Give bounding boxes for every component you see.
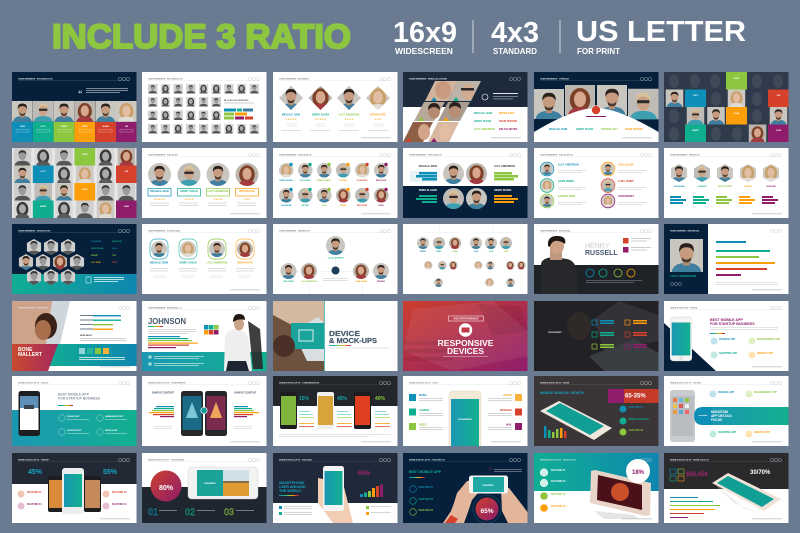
- slide: curved photo team: DAVID DUPONT: [625, 128, 644, 131]
- slide: large phone with side features: MAIL: [506, 424, 513, 426]
- slide: hexagon honeycomb: TEAM MEMBERS : HEXAGON 02: [18, 230, 51, 232]
- slide: Henry Russell profile: HENRY: [585, 243, 610, 250]
- slide: best mobile app black phone: BEST MOBILE APP: [58, 392, 90, 396]
- slide: hexagon honeycomb: HENRY SUSAN: [91, 247, 104, 250]
- slide: two black phones comparison: MOBILE MOCK-UP 01 : COMPARISON: [148, 382, 186, 384]
- slide: hexagon honeycomb: ROBERT: [91, 255, 99, 257]
- slide: landscape phone 80%: MOBILE MOCK-UP 01 : HORIZONTAL: [148, 458, 185, 462]
- slide: Bone Mallert: MALLERT: [18, 352, 42, 358]
- slide: phone group percentages: MOBILE MOCK-UP 01 : GROUP: [18, 460, 50, 462]
- slide: silver phone banner: FINANCE APP: [718, 391, 735, 394]
- slide: circular team 02: KATE ROSE: [357, 204, 368, 207]
- slide: circular team 01: ★★★: [244, 197, 251, 201]
- slide: circular team with rings: JOHN MONET: [618, 195, 634, 198]
- ratio: 4x3 standard: 4x3: [491, 17, 539, 49]
- slide: circular team 03 with bars: LUCY ANDERSON: [494, 165, 515, 168]
- slide: hexagon team with bars: JOHNSON: [698, 186, 707, 188]
- slide: Bone Mallert: MORE ABOUT: [80, 334, 93, 337]
- slide: dark mosaic team: [664, 72, 789, 142]
- slide: rectangle team: JOHN: [20, 126, 26, 128]
- ratio: 16x9 widescreen: 16x9: [393, 17, 457, 49]
- ratio: US Letter for print: FOR PRINT: [577, 46, 621, 56]
- slide: Johnson profile: JOHNSON: [148, 317, 186, 326]
- slide: mosaic colour grid: HENRY: [40, 206, 47, 208]
- slide: Henry Russell profile: [534, 224, 658, 294]
- slide: circular team 03 with bars: MICHALE JOHN: [419, 165, 437, 168]
- slide: circular team 01: [142, 148, 267, 218]
- slide: large phone with side features: MOBILE MOCK-UP 01 : GOLD: [409, 382, 439, 384]
- slide: circular team 02: THOMAS: [339, 179, 348, 182]
- slide: best mobile app white phone: MANAGEMENT APP: [757, 338, 780, 341]
- slide: circular team 01: MICHALE JOHN: [150, 190, 169, 193]
- slide: rectangle team: JIM: [125, 126, 128, 128]
- slide: circular team 02: SUSAN: [340, 204, 347, 207]
- slide: large phone with side features: MESSAGE: [500, 409, 512, 412]
- slide: org chart part 2: LUCA: [489, 250, 494, 253]
- slide: circular team 02: ROSA: [378, 204, 384, 207]
- slide: hexagon team with bars: ROSE ANN: [766, 185, 776, 188]
- slide: landscape phone 80%: 80%: [159, 485, 174, 492]
- slide: best mobile app black phone: MOBILE MOCK-UP 01 : BLACK: [18, 382, 49, 384]
- slide: hexagon team with bars: THOMAS: [744, 185, 753, 188]
- slide: curved photo team: [534, 72, 658, 142]
- slide: hands holding phone: BEST MOBILE APP: [409, 470, 442, 474]
- phone: mountain: [458, 417, 472, 421]
- slide: circular team 02: JOHN: [322, 205, 327, 207]
- phone: [540, 401, 612, 440]
- slide: best mobile app black phone: SERVICE APP: [105, 429, 118, 432]
- slide: large phone with side features: [403, 376, 528, 451]
- slide: hexagon honeycomb: LUCA: [112, 247, 117, 250]
- slide: Johnson profile: TEAM MEMBERS : INDIVIDUAL 02: [148, 306, 183, 310]
- slide: diamond team: ★★★★★: [315, 117, 327, 121]
- slide: rose-gold phone with bars: $65,458: [686, 472, 708, 478]
- slide: responsive devices divider: [403, 301, 528, 371]
- slide: smartphone in hand: USER AROUND: [279, 485, 306, 489]
- slide: parallelogram team: BRYAN KATE: [499, 112, 515, 115]
- slide: dark phone on teal: MOBILE MOCK-UP 01 : ROSE GOLD: [540, 460, 576, 462]
- slide: circular team 02: HENRY SUSAN: [280, 179, 293, 182]
- slide: mosaic colour grid: LUCY: [41, 171, 47, 173]
- slide: phone group percentages: FEATURE 03: [112, 491, 127, 494]
- slide: landscape phone 80%: [142, 453, 267, 523]
- slide: hexagon honeycomb: JANE ROSE: [112, 240, 123, 243]
- slide: dark phone on teal: 18%: [632, 470, 645, 476]
- ratio: 4x3 standard: STANDARD: [493, 46, 537, 56]
- slide: Bone Mallert: BONE: [18, 347, 33, 353]
- slide: curved photo team: HENRY SUSAN: [576, 128, 594, 131]
- slide: circular team 02: [273, 148, 398, 218]
- slide: parallelogram team: HENRY SUSAN: [474, 120, 492, 123]
- slide: smartphone in hand: MOBILE MOCK-UP 01 : HOLDING: [279, 460, 312, 462]
- slide: rectangle team: [12, 72, 137, 142]
- slide: silver phone banner: [664, 376, 789, 446]
- slide: device and mock-ups divider: DEVICE: [329, 331, 360, 338]
- slide: circular team 02: JOHN ADAM: [281, 204, 292, 207]
- slide: silver phone banner: mountain: [698, 414, 708, 417]
- slide: org chart part 2: HENRY: [436, 251, 442, 253]
- slide: org chart part 2: SUSAN: [452, 250, 458, 253]
- slide: dark phone on teal: FEATURE 01: [551, 469, 566, 472]
- slide: smartphone in hand: SMARTPHONE: [279, 481, 305, 485]
- slide: smartphone in hand: THE WORLD: [279, 489, 301, 493]
- slide: rose-gold phone with bars: MOBILE MOCK-UP 01 : ROSE GOLD 02: [670, 460, 709, 462]
- slide: hexagon team with bars: JOHN ADAM: [674, 185, 685, 188]
- slide: mosaic colour grid: ELISA: [82, 188, 88, 191]
- slide: individual with bars: TEAM MEMBER : INDIVIDUAL: [670, 230, 700, 232]
- slide: dark phone on teal: FEATURE 04: [551, 505, 566, 508]
- slide: greyscale grid: [142, 72, 267, 142]
- slide: diamond team: TEAM MEMBERS : RHOMBUS: [279, 78, 309, 80]
- slide: best mobile app white phone: [664, 301, 789, 371]
- slide: parallelogram team: [403, 72, 528, 142]
- slide: greyscale grid: BLOCKS ON CATEGORY: [224, 99, 249, 102]
- slide: parallelogram team: TEAM MEMBERS : PARALLELOGRAM: [409, 78, 447, 80]
- portrait: [224, 314, 263, 371]
- slide: silver phone banner: SERVICE APP: [754, 431, 770, 434]
- slide: org chart part 2: JOHN: [474, 251, 478, 253]
- slide: circular team 02: TEAM MEMBERS : CIRCULAR 02: [279, 154, 313, 156]
- slide: landscape phone 80%: 02: [185, 507, 195, 517]
- slide: hexagon honeycomb: JOHN ADAM: [91, 240, 102, 243]
- slide: circular team 02: ERICK BOB: [376, 180, 387, 182]
- slide: circular team with rings: LYDIA JONES: [618, 180, 634, 183]
- phone: mountain: [204, 482, 216, 485]
- slide: mosaic colour grid: JOHN: [124, 206, 130, 208]
- slide: landscape phone 80%: 03: [224, 507, 234, 517]
- slide: curved photo team: MICHALE JOHN: [549, 128, 567, 131]
- slide: circular team 03 with bars: HENRY RUSSO: [494, 189, 512, 192]
- slide: diamond team: ★★★★: [344, 117, 354, 121]
- slide: dark rose-gold phone stats: FEATURE 03: [628, 429, 644, 432]
- slide: best mobile app black phone: [12, 376, 136, 446]
- slide: dark rose-gold phone stats: 65-35%: [625, 394, 646, 400]
- slide: circular team with rings: TEAM MEMBERS : CIRCULAR 04: [540, 154, 574, 156]
- slide: circular team 03 with bars: BOBO ELLIANS: [419, 189, 437, 192]
- slide: device and mock-ups divider: & MOCK-UPS: [329, 338, 377, 345]
- slide: hands holding phone: “: [489, 468, 492, 474]
- slide: dark rose-gold phone stats: MOBILE SEARCH: [628, 418, 649, 421]
- slide: best mobile app white phone: BEST MOBILE APP: [710, 318, 743, 322]
- slide: diamond team: ★★★★★: [285, 117, 297, 121]
- slide: circular team with rings: ADAM MONET: [558, 180, 575, 183]
- slide: Henry Russell profile: TEAM MEMBERS : INDIVIDUAL: [540, 230, 572, 232]
- slide: circular team 01: HENRY SUSAN: [180, 190, 198, 193]
- slide: best mobile app black phone: SHOPPING APP: [67, 429, 82, 432]
- slide: best mobile app black phone: FINANCE APP: [67, 415, 80, 418]
- slide: individual with bars: [664, 224, 789, 294]
- slide: org chart part 1: JOHN ELENA: [355, 280, 367, 283]
- slide: hexagon honeycomb: LUCY ANNE: [91, 261, 102, 264]
- slide: dark rose-gold phone stats: MOBILE SEARCH / MONTH: [540, 391, 584, 395]
- slide: rectangle team: “: [78, 89, 82, 99]
- hand and phone: [318, 466, 353, 523]
- slide: rectangle team: LUCY: [41, 126, 47, 128]
- slide: diamond team: [273, 72, 398, 142]
- slide: org chart part 2: ROBERT: [420, 251, 426, 253]
- slide: phone group percentages: [12, 453, 136, 523]
- slide: circular team 02: HENRY ROBERT: [317, 180, 332, 182]
- slide: hands holding phone: mountain: [482, 484, 494, 487]
- slide: diamond team: MICHALE JOHN: [282, 114, 300, 116]
- slide: org chart part 1: [273, 224, 398, 294]
- slide: best mobile app black phone: MANAGEMENT APP: [105, 415, 124, 418]
- slide: three phones percentages: MOBILE MOCK-UP 01 : COMPARISON 02: [279, 382, 320, 384]
- hands: [443, 478, 528, 523]
- slide: mosaic colour grid: [12, 148, 137, 218]
- slide: dark rose-gold phone stats: MOBILE MOCK-UP 01 : ROSE: [540, 382, 570, 384]
- slide: circular team with rings: [534, 148, 658, 218]
- slide: device and mock-ups divider: [273, 301, 398, 371]
- slide: organic frame team: LUCY ANDERSON: [207, 262, 228, 264]
- slide: hands holding phone: FEATURE 02: [418, 498, 434, 501]
- slide: hands holding phone: 65%: [480, 508, 494, 515]
- slide: mosaic colour grid: JOE: [125, 171, 129, 173]
- slide: parallelogram team: DAVID DUPONT: [499, 120, 518, 123]
- slide: Bone Mallert: [12, 301, 136, 371]
- slide: phone group percentages: FEATURE 01: [27, 491, 42, 494]
- slide: silver phone banner: MOBILE MOCK-UP 01 : SILVER: [670, 382, 701, 384]
- slide: circular team 01: LUCY ANDERSON: [208, 190, 229, 193]
- slide: silver phone banner: SHOPPING APP: [718, 431, 737, 434]
- slide: Henry Russell profile: RUSSELL: [585, 250, 618, 257]
- slide: org chart part 1: LUCAS JOHNSON: [328, 256, 344, 260]
- slide: individual with bars: LUCY ANDERSON: [670, 274, 696, 278]
- slide: best mobile app white phone: MOBILE MOCK-UP : WHITE: [670, 308, 698, 310]
- slide: dark mosaic team: ELISA: [734, 112, 740, 115]
- slide: large phone with side features: PHOTO: [504, 394, 512, 397]
- slide: landscape phone 80%: 01: [148, 507, 158, 517]
- slide: rectangle team: HENRY: [61, 126, 68, 128]
- slide: rose-gold phone with bars: [664, 453, 789, 523]
- slide: phone group percentages: FEATURE 04: [27, 503, 42, 506]
- slide: dark mosaic team: HENRY: [692, 130, 700, 132]
- slide: three phones percentages: 45%: [337, 396, 348, 402]
- slide: circular team 02: JULIA ROSE: [357, 179, 368, 182]
- portrait: [541, 236, 575, 265]
- slide: dark phone on teal: [534, 453, 658, 523]
- slide: three phones percentages: 15%: [299, 396, 310, 402]
- slide: parallelogram team: ERLICH MOTEN: [499, 128, 517, 131]
- slide: dark rose-gold phone stats: FEATURE 01: [628, 406, 644, 409]
- slide: curved photo team: TEAM MEMBERS : ITTERIUM: [540, 78, 569, 80]
- slide: curved photo team: STEVEN LUCY: [601, 128, 618, 131]
- slide: circular team 03 with bars: TEAM MEMBERS : CIRCULAR 03: [409, 154, 443, 156]
- slide: dark laptop feature icons: mountain: [548, 330, 562, 334]
- slide: dark mosaic team: KATIE: [734, 77, 740, 80]
- slide: large phone with side features: MUSIC: [419, 394, 427, 397]
- slide: hands holding phone: MOBILE MOCK-UP 01 : HOLDING 02: [409, 460, 446, 462]
- title: INCLUDE 3 RATIO: [52, 18, 351, 56]
- slide: hexagon honeycomb: [12, 224, 136, 294]
- slide: large phone with side features: VIDEO: [419, 424, 427, 426]
- slide: organic frame team: TEAM MEMBERS : OCTAGONAL: [148, 230, 181, 232]
- slide: dark mosaic team: LUCY: [693, 95, 699, 97]
- slide: dark laptop feature icons: [534, 301, 658, 371]
- slide: hexagon team with bars: HENRY ROBERT: [718, 186, 733, 188]
- slide: organic frame team: [142, 224, 267, 294]
- slide: silver phone banner: APP DETAILS: [711, 414, 732, 418]
- slide: rectangle team: TEAM MEMBERS : RECTANGLE 06: [18, 78, 53, 80]
- slide: dark mosaic team: JOE: [777, 95, 781, 97]
- slide: org chart part 1: JENI JONES: [283, 281, 295, 283]
- slide: parallelogram team: MICHALE JOHN: [474, 112, 492, 115]
- slide: hands holding phone: FEATURE 03: [418, 509, 434, 512]
- slide: dark phone on teal: FEATURE 02: [551, 480, 566, 483]
- slide: dark rose-gold phone stats: [534, 376, 658, 446]
- slide: best mobile app black phone: FOR STARTUP BUSINESS: [58, 396, 101, 400]
- slide: phone group percentages: FEATURE 04: [112, 503, 127, 506]
- slide: hexagon team with bars: TEAM MEMBERS : HEXAGON: [670, 154, 700, 156]
- ratio: 16x9 widescreen: WIDESCREEN: [395, 46, 453, 56]
- slide: rose-gold phone with bars: 30/70%: [750, 470, 771, 476]
- slide: parallelogram team: LUCY ANDERSON: [474, 128, 495, 131]
- slide: circular team 01: ★★★★: [184, 197, 194, 201]
- slide: organic frame team: HENRY SUSAN: [179, 262, 197, 264]
- phone: [590, 470, 651, 516]
- slide: hexagon honeycomb: TOM: [112, 255, 116, 257]
- slide: diamond team: LUCY ANDERSON: [339, 114, 360, 116]
- slide: two black phones comparison: SAMPLE CONTENT: [234, 392, 257, 394]
- slide: circular team with rings: JULIA ALLEN: [618, 164, 634, 166]
- slide: dark phone on teal: FEATURE 03: [551, 493, 566, 496]
- slide: diamond team: HENRY SUSAN: [312, 114, 329, 116]
- slide: hexagon team with bars: [664, 148, 789, 218]
- slide: responsive devices divider: RESPONSIVE: [438, 339, 494, 348]
- slide: three phones percentages: [273, 376, 398, 446]
- slide: greyscale grid: TEAM MEMBERS : RECTANGLE 02: [148, 78, 183, 80]
- slide: rectangle team: KATIE: [82, 125, 88, 128]
- slide: circular team 01: ★★★★★: [154, 197, 166, 201]
- slide: circular team with rings: LUCY ANDERSON: [558, 164, 579, 166]
- slide: circular team 01: BRYAN KATE: [239, 190, 255, 193]
- slide: diamond team: BRYAN KATE: [370, 114, 386, 116]
- slide: best mobile app white phone: FOR STARTUP BUSINESS: [710, 322, 755, 326]
- slide: hands holding phone: [403, 453, 528, 523]
- ratio: US Letter for print: US LETTER: [576, 16, 746, 48]
- slide: circular team with rings: ALMOST WOW: [558, 195, 576, 198]
- slide: org chart part 1: LUCY ANDERSON: [301, 280, 317, 283]
- slide: dark mosaic team: JOHN: [776, 130, 782, 132]
- slide: org chart part 2: KATIE: [504, 250, 508, 253]
- slide: circular team 01: ★★★★: [213, 197, 223, 201]
- slide: circular team 02: LUCA KASE: [300, 179, 311, 182]
- slide: smartphone in hand: [273, 453, 398, 523]
- slide: responsive devices divider: DEVICES: [447, 347, 485, 356]
- slide: two black phones comparison: [142, 376, 267, 446]
- slide: circular team 02: JIM LINE: [301, 205, 310, 207]
- slide: three phones percentages: 40%: [375, 396, 386, 402]
- slide: silver phone banner: FOCUS: [711, 418, 722, 422]
- phone: [18, 391, 40, 436]
- slide: hexagon honeycomb: ERICK: [112, 262, 118, 264]
- slide: circular team 03 with bars: [403, 148, 528, 218]
- slide: large phone with side features: CAMERA: [419, 409, 430, 412]
- slide: best mobile app white phone: SHOPPING APP: [719, 352, 738, 355]
- slide: org chart part 1: TEAM MEMBERS : HIERARCHY: [279, 230, 311, 232]
- slide: mosaic colour grid: KATIE: [82, 153, 88, 156]
- slide: phone group percentages: 45%: [28, 469, 43, 476]
- slide: rectangle team: SUSAN: [102, 125, 110, 128]
- slide: Johnson profile: [142, 301, 267, 371]
- slide: two black phones comparison: SAMPLE CONTENT: [152, 392, 175, 394]
- slide: phone group percentages: 55%: [103, 469, 118, 476]
- slide: responsive devices divider: HIGH PERFORMANCE: [453, 318, 479, 321]
- slide: best mobile app white phone: FINANCE APP: [719, 338, 736, 341]
- slide: diamond team: ★★★: [375, 117, 382, 121]
- slide: best mobile app white phone: SERVICE APP: [757, 352, 773, 355]
- phone: [712, 473, 781, 511]
- slide: circular team 01: TEAM MEMBERS : CIRCULAR: [148, 154, 178, 156]
- slide: org chart part 2: [403, 224, 528, 294]
- slide: org chart part 1: BRYNNA: [377, 280, 386, 283]
- slide: silver phone banner: MANAGEMENT APP: [754, 391, 777, 394]
- slide: hands holding phone: FEATURE 01: [418, 486, 434, 489]
- slide: organic frame team: MICHALE JOHN: [150, 262, 168, 264]
- slide: Bone Mallert: TEAM MEMBERS : INDIVIDUAL: [18, 306, 50, 310]
- slide: smartphone in hand: 65%: [358, 471, 371, 477]
- slide: organic frame team: BRYAN KATE: [237, 262, 253, 264]
- slide: silver phone banner: MOUNTAIN: [711, 410, 729, 414]
